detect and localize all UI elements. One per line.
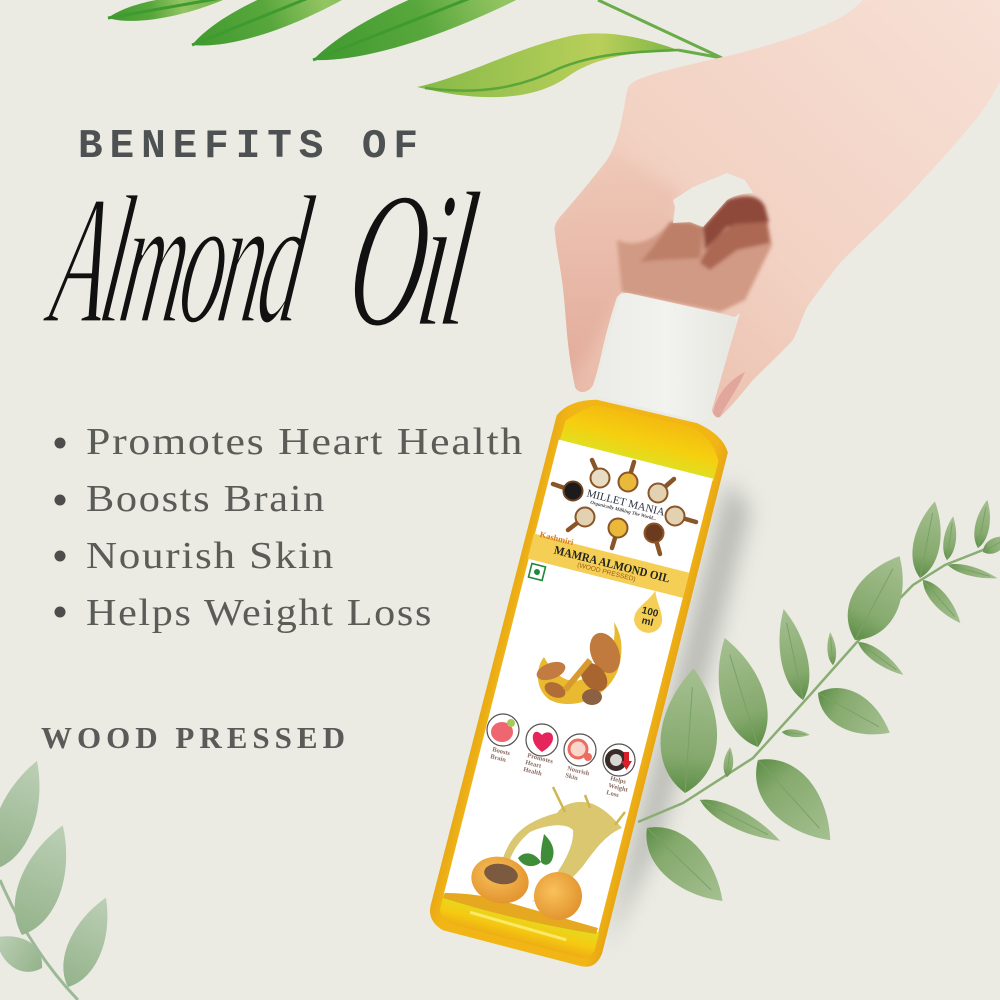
product name text: MAMRA ALMOND OIL [553, 543, 671, 586]
icon: 100 ml drop: 100 [640, 605, 660, 620]
apricot half [466, 851, 534, 909]
bullet: weight loss: Helps Weight Loss [86, 592, 433, 634]
brand name: MILLET MANIA [585, 487, 666, 519]
bottle body [425, 389, 734, 970]
benefit icon captions [490, 746, 629, 799]
hand [540, 0, 1000, 418]
bottom-left leaf branch [0, 754, 121, 1000]
heading: almond oil script: Oil [337, 153, 489, 368]
benefit icon captions: Brain [490, 753, 507, 764]
bullet: heart health: Promotes Heart Health [86, 421, 524, 463]
icon: boosts brain [487, 714, 519, 746]
benefit icon captions: Loss [606, 789, 620, 799]
index finger shading [554, 162, 676, 380]
bottle cap [595, 293, 736, 421]
product name text [539, 529, 671, 586]
benefit icon captions: Boosts [492, 746, 511, 757]
benefit icon captions: Weight [608, 782, 629, 794]
bullet: brain: Boosts Brain [86, 478, 326, 520]
icon: heart health [526, 724, 558, 756]
icon: vegetarian mark [528, 563, 546, 581]
brand logo spoons [553, 460, 696, 554]
whole apricot [534, 872, 582, 920]
heading: almond oil script [36, 153, 489, 368]
benefit icon captions: Nourish [567, 765, 590, 778]
oil pool [443, 893, 598, 934]
oil highlight top [559, 396, 725, 481]
benefit icon captions: Heart [525, 759, 543, 770]
almond and oil splash illustration [534, 622, 626, 705]
bottle [425, 389, 734, 970]
wood pressed caption: WOOD PRESSED [41, 720, 345, 755]
apricot and oil splash illustration [443, 787, 625, 934]
gap between fingers [673, 173, 753, 227]
heading: almond oil script: Almond [36, 158, 324, 362]
icon: weight loss [603, 744, 635, 776]
bullet: skin: Nourish Skin [86, 535, 335, 577]
product name text: Kashmiri [539, 529, 575, 547]
icon: nourish skin [564, 734, 596, 766]
benefit icons on label [487, 714, 635, 776]
logo band [528, 533, 689, 598]
icon: 100 ml drop: ml [640, 615, 655, 629]
benefit icon captions: Helps [610, 775, 627, 786]
benefit icon captions: Health [523, 766, 543, 778]
thumb nail [713, 372, 745, 417]
product name text: (WOOD PRESSED) [576, 562, 636, 583]
icon: 100 ml drop [631, 587, 669, 636]
brand tagline: Organically Milking The World... [590, 501, 657, 522]
right leaf branch [632, 499, 1000, 916]
oil base highlight [437, 893, 599, 961]
hand silhouette [555, 0, 1000, 418]
curled fingers [617, 196, 772, 312]
top leaves [106, 0, 722, 97]
benefit icon captions: Skin [565, 772, 579, 782]
green leaves [541, 834, 554, 865]
benefit icon captions: Promotes [527, 752, 554, 765]
white label [444, 440, 713, 932]
bottle shadow [605, 480, 750, 950]
benefits list [54, 421, 524, 634]
oil splash [503, 802, 622, 902]
heading: benefits of: BENEFITS OF [78, 124, 418, 170]
